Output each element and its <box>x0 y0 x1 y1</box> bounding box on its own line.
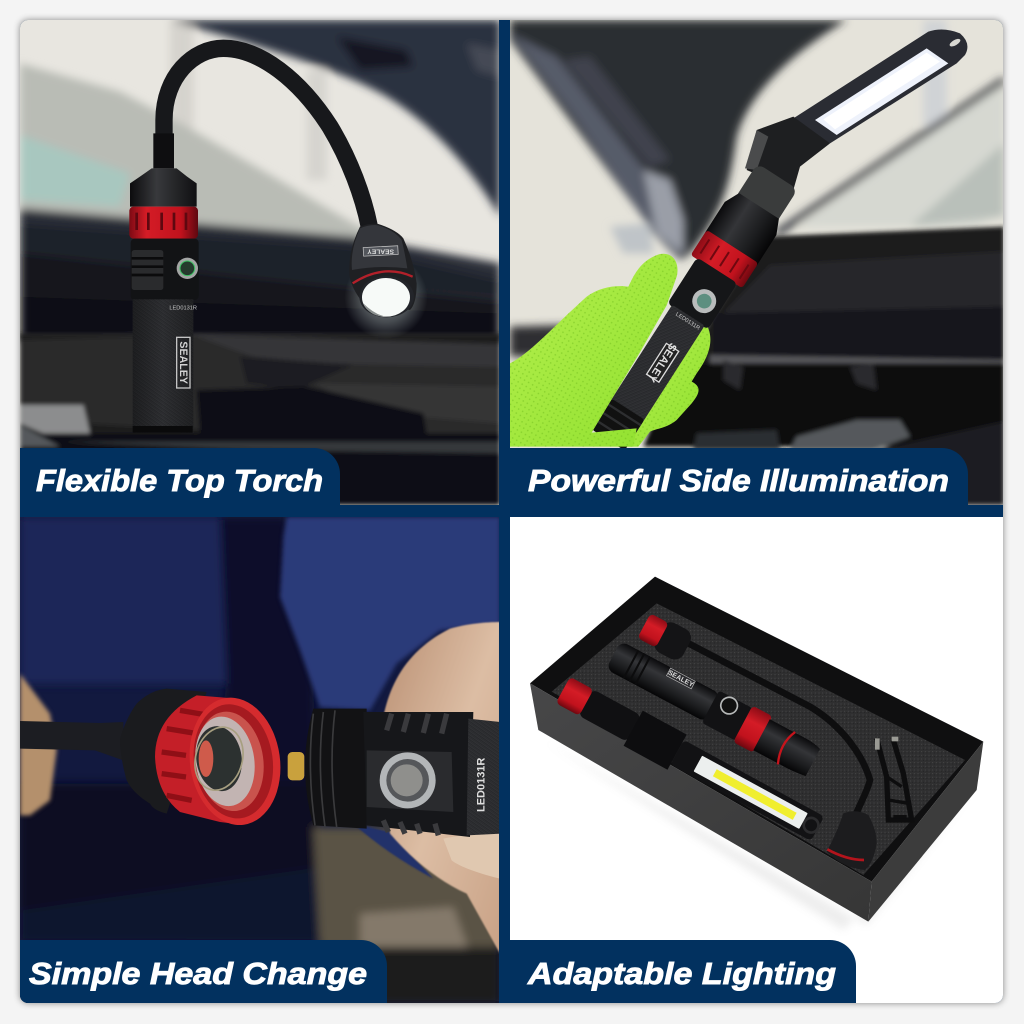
green glove <box>510 254 678 447</box>
body housing <box>363 712 473 837</box>
red ring opening <box>190 698 280 825</box>
torch: extended side work light held in glove <box>510 30 967 457</box>
work light bar <box>793 30 967 143</box>
box front wall <box>530 683 872 922</box>
label tab: simple head change <box>20 940 387 1003</box>
collar <box>705 193 779 265</box>
foam insert <box>552 603 965 875</box>
threaded neck <box>305 709 367 829</box>
threaded interior and glass <box>194 704 273 818</box>
switch housing <box>130 238 199 290</box>
box right wall <box>868 742 983 922</box>
photo background: car under open bonnet <box>20 20 500 505</box>
panel: adaptable lighting <box>510 517 1003 1003</box>
panel: simple head change <box>20 517 500 1004</box>
gold contact <box>288 752 304 780</box>
label tab: adaptable lighting <box>510 940 856 1003</box>
neck <box>738 166 795 219</box>
knurled handle <box>133 299 197 433</box>
label tab: flexible top torch <box>20 448 340 505</box>
knurled handle: SEALEY <box>177 341 189 384</box>
knurled handle and model number <box>467 719 500 835</box>
knurled handle <box>592 305 705 450</box>
detached red torch head <box>20 689 288 831</box>
photo background: workshop and engine bay <box>510 20 1004 505</box>
product box with foam tray <box>530 577 983 930</box>
panel: powerful side illumination <box>510 20 1004 505</box>
assembled torch <box>604 637 823 780</box>
knurled handle and model number: LED0131R <box>476 758 488 812</box>
knurled handle: LED0131R <box>169 305 197 311</box>
right hand <box>383 622 500 954</box>
torch: upright handle with gooseneck <box>129 48 428 433</box>
photo background: navy sweatshirt and hands <box>20 517 500 1004</box>
torch head with lit lens <box>344 224 428 339</box>
black collar <box>120 689 207 814</box>
torch body along axis <box>593 166 795 448</box>
label tab: powerful side illumination: Powerful Side Illumination <box>528 463 949 498</box>
glove back fingers <box>623 325 710 447</box>
USB cable <box>875 737 912 820</box>
switch button <box>380 752 436 808</box>
box soft shadow <box>543 740 970 930</box>
panel: flexible top torch <box>20 20 500 505</box>
swivel joint <box>745 117 830 190</box>
flexible cable <box>20 721 123 760</box>
label tab: powerful side illumination <box>510 448 968 505</box>
switch body <box>667 257 737 330</box>
red ring <box>129 207 198 239</box>
label tab: adaptable lighting: Adaptable Lighting <box>527 956 836 991</box>
torch head with lit lens: SEALEY <box>367 247 394 254</box>
box rim and interior walls <box>530 577 983 882</box>
label tab: simple head change: Simple Head Change <box>29 956 367 991</box>
gooseneck lamp in box <box>636 611 877 870</box>
gooseneck <box>164 48 369 227</box>
torch body with switch <box>288 709 500 837</box>
red ring side <box>155 695 237 824</box>
knurled handle: SEALEY <box>645 340 679 385</box>
left hand <box>20 674 57 815</box>
collar <box>130 133 197 207</box>
knurled handle: LED0131R <box>674 312 701 332</box>
label tab: flexible top torch: Flexible Top Torch <box>36 463 323 498</box>
red ring <box>691 230 758 288</box>
assembled torch: SEALEY <box>667 670 695 689</box>
work light with COB panel <box>553 672 827 846</box>
